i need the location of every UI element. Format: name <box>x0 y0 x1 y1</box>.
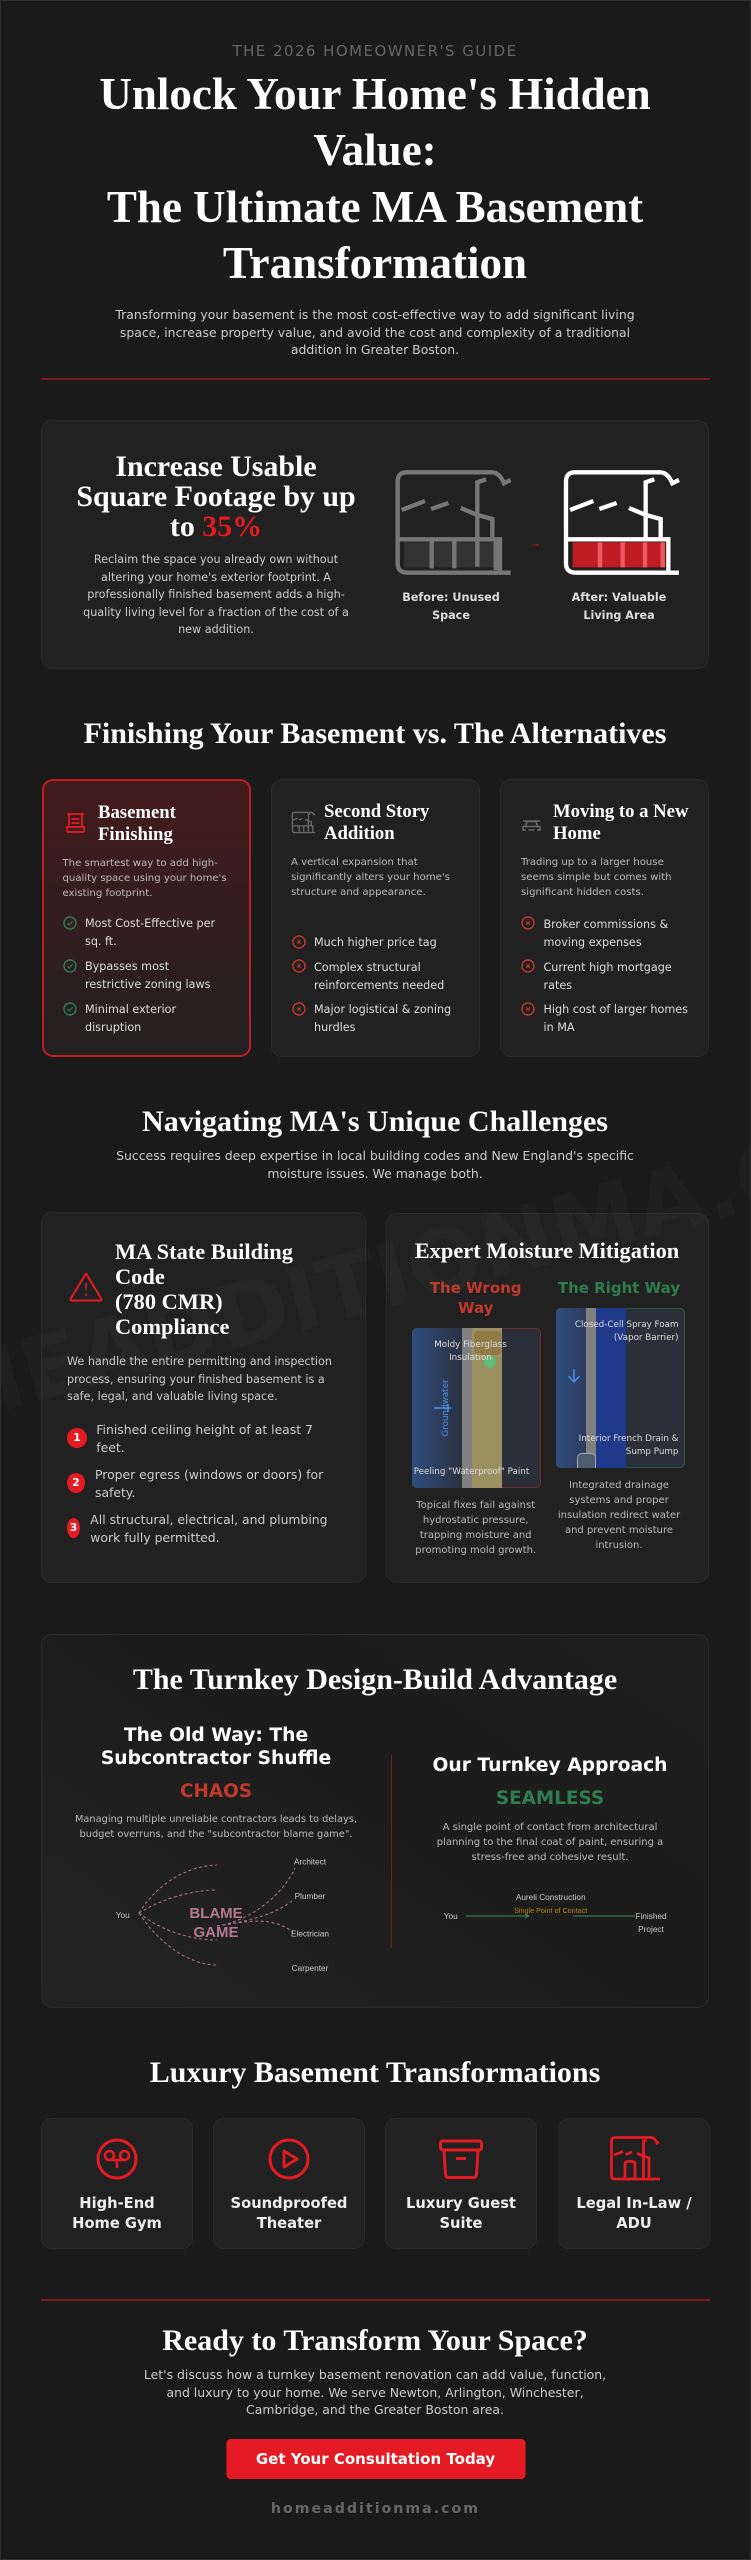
description: Trading up to a larger house <box>521 857 664 868</box>
subtitle: space, increase property value, and avoid the cost and complexity of a traditional <box>120 325 630 340</box>
drawback 1 <box>544 918 668 949</box>
subtitle: addition in Greater Boston. <box>291 342 459 357</box>
icon: play <box>267 2137 311 2181</box>
button: Get Your Consultation Today <box>256 2450 495 2468</box>
heading <box>76 450 356 543</box>
label: groundwater: Groundwater <box>441 1379 451 1437</box>
label: Home Gym <box>72 2215 162 2232</box>
label: insulation <box>434 1339 507 1364</box>
wrong way caption <box>415 1498 536 1558</box>
panel: theater <box>213 2118 365 2249</box>
description: significantly alters your home's <box>291 872 450 883</box>
heading: Expert Moisture Mitigation <box>415 1238 679 1263</box>
heading: Increase Usable <box>115 450 317 483</box>
description: quality space using your home's <box>62 872 227 884</box>
heading <box>115 1238 293 1338</box>
description: new addition. <box>178 623 254 636</box>
badge 2 <box>67 1473 85 1493</box>
badge 3 <box>67 1518 80 1538</box>
heading <box>98 802 176 845</box>
requirement 2: safety. <box>95 1485 135 1500</box>
description <box>520 857 672 898</box>
right way caption: systems and proper <box>569 1495 669 1506</box>
badge 1 <box>67 1428 87 1448</box>
description <box>291 857 450 898</box>
heading: Ready to Transform Your Space? <box>162 2324 588 2357</box>
header rule <box>41 378 710 380</box>
drawback 2 <box>314 961 444 992</box>
wrong way caption: hydrostatic pressure, <box>423 1515 528 1526</box>
peeling paint layer <box>472 1328 502 1488</box>
icon: gym <box>95 2137 139 2181</box>
label: Soundproofed <box>231 2195 347 2212</box>
description: seems simple but comes with <box>521 872 672 883</box>
right way heading: The Right Way <box>558 1279 680 1297</box>
chaos label: CHAOS <box>180 1781 252 1802</box>
drawback 3: in MA <box>544 1021 575 1034</box>
icon: house with door <box>610 2136 660 2181</box>
description: The smartest way to add high- <box>62 858 218 868</box>
heading: Square Footage by up <box>76 480 356 513</box>
label: foam <box>575 1319 678 1344</box>
groundwater layer <box>412 1328 462 1488</box>
description <box>144 2366 606 2419</box>
wrong way heading: Way <box>458 1299 493 1317</box>
old way description: Managing multiple unreliable contractors leads to delays, <box>75 1814 357 1825</box>
drawback 1: Broker commissions & <box>544 918 668 931</box>
drawback 2 <box>544 961 672 992</box>
panel: turnkey advantage <box>41 1634 709 2008</box>
wrong way heading: The Wrong <box>430 1279 522 1297</box>
vertical divider <box>390 1755 392 1948</box>
heading: transformations: Luxury Basement Transformations <box>150 2056 600 2089</box>
icon: check <box>63 959 77 973</box>
description: safe, legal, and valuable living space. <box>67 1390 278 1403</box>
benefit 1: Most Cost-Effective per <box>85 917 215 930</box>
footer rule <box>41 2299 710 2301</box>
description: altering your home's exterior footprint. A <box>101 571 331 584</box>
drawback 1: Much higher price tag <box>314 936 437 949</box>
panel: second story addition <box>271 779 480 1057</box>
heading: Addition <box>324 823 395 844</box>
benefit 3: disruption <box>85 1021 141 1034</box>
label: before <box>402 591 500 622</box>
description: structure and appearance. <box>291 887 426 898</box>
diagram: right way <box>556 1308 684 1468</box>
challenges intro <box>116 1148 634 1181</box>
heading: Home <box>553 823 601 844</box>
old way heading: The Old Way: The <box>124 1725 308 1746</box>
description: We handle the entire permitting and inspection <box>67 1355 332 1368</box>
heading <box>324 801 430 844</box>
diagram: subcontractor chaos: GAME <box>194 1924 238 1941</box>
label: before: Before: Unused <box>402 591 500 604</box>
icon: second story <box>292 812 316 834</box>
seamless label: SEAMLESS <box>496 1788 604 1809</box>
requirement 3: All structural, electrical, and plumbing <box>90 1512 328 1527</box>
icon: warning <box>69 1272 103 1302</box>
benefit 2 <box>85 960 210 991</box>
wrong way caption: trapping moisture and <box>420 1530 532 1541</box>
old way heading: Subcontractor Shuffle <box>101 1748 331 1769</box>
drawback 1: moving expenses <box>544 936 642 949</box>
icon: after house <box>566 472 679 573</box>
label <box>406 2194 516 2234</box>
panel: home gym <box>41 2118 193 2249</box>
description: quality living level for a fraction of the cost of a <box>83 606 349 619</box>
panel: guest suite <box>385 2118 537 2249</box>
label: after <box>572 591 666 622</box>
benefit 1 <box>85 917 216 948</box>
badge 3: 3 <box>70 1521 77 1534</box>
heading: The Turnkey Design-Build Advantage <box>133 1663 617 1696</box>
subtitle <box>115 307 635 357</box>
diagram: seamless line: Project <box>638 1925 665 1934</box>
icon: cross <box>521 959 535 973</box>
icon: before and after basement diagrams <box>396 470 680 575</box>
description <box>83 553 349 636</box>
label <box>231 2194 347 2234</box>
description: professionally finished basement adds a high- <box>87 588 345 601</box>
diagram: subcontractor chaos: Architect <box>294 1858 327 1866</box>
heading: comparison: Finishing Your Basement vs. The Alternatives <box>84 717 666 750</box>
right way caption: and prevent moisture <box>565 1525 673 1536</box>
heading: Second Story <box>324 801 429 822</box>
requirement 1 <box>96 1422 313 1455</box>
diagram: subcontractor chaos: You <box>116 1911 130 1920</box>
description: existing footprint. <box>62 888 152 898</box>
benefit 2: Bypasses most <box>85 960 169 973</box>
heading: Compliance <box>115 1314 229 1338</box>
heading: Code <box>115 1264 165 1288</box>
panel: moving to a new home <box>500 779 709 1057</box>
spray foam layer <box>596 1308 626 1468</box>
label: foam: (Vapor Barrier) <box>614 1332 678 1342</box>
diagram: subcontractor chaos: Carpenter <box>292 1964 329 1973</box>
icon: check <box>63 1002 77 1016</box>
icon: cross <box>521 1002 535 1016</box>
heading: to 35% <box>170 510 262 543</box>
title: The Ultimate MA Basement <box>107 182 643 232</box>
groundwater layer <box>556 1308 586 1468</box>
label: Suite <box>439 2215 483 2232</box>
heading: Moving to a New <box>553 801 688 822</box>
challenges intro: moisture issues. We manage both. <box>267 1166 483 1181</box>
diagram: seamless line: Single Point of Contact <box>514 1906 587 1915</box>
turnkey description <box>437 1820 663 1865</box>
benefit 3: Minimal exterior <box>85 1003 176 1016</box>
label: Luxury Guest <box>406 2195 516 2212</box>
wrong way caption: Topical fixes fail against <box>416 1500 535 1511</box>
label: insulation: Moldy Fiberglass <box>434 1340 507 1350</box>
diagram: seamless line: You <box>444 1912 458 1921</box>
description: significant hidden costs. <box>521 887 644 898</box>
diagram: subcontractor chaos: BLAME <box>189 1905 243 1922</box>
diagram: seamless line <box>440 1884 670 1944</box>
label <box>72 2194 162 2234</box>
label: paint: Peeling "Waterproof" Paint <box>414 1466 529 1476</box>
challenges intro: Success requires deep expertise in local building codes and New England's specific <box>116 1148 634 1163</box>
subtitle: Transforming your basement is the most cost-effective way to add significant living <box>115 307 635 322</box>
sump pump <box>576 1453 596 1469</box>
diagram: subcontractor chaos <box>101 1854 341 1974</box>
title <box>99 69 651 288</box>
diagram: subcontractor chaos: Electrician <box>291 1930 329 1938</box>
label: after: After: Valuable <box>572 591 666 604</box>
requirement 2: Proper egress (windows or doors) for <box>95 1467 323 1482</box>
drawback 2: rates <box>544 979 572 992</box>
old way description <box>75 1812 357 1842</box>
badge 2: 2 <box>72 1476 80 1489</box>
title: Value: <box>313 125 437 175</box>
icon: basement <box>66 813 85 833</box>
title: Transformation <box>223 238 527 288</box>
drawback 3: hurdles <box>314 1021 356 1034</box>
icon: cross <box>292 1002 306 1016</box>
description: Let's discuss how a turnkey basement renovation can add value, function, <box>144 2367 606 2382</box>
label: drain: Interior French Drain & <box>579 1434 678 1444</box>
drawback 2: Current high mortgage <box>544 961 672 974</box>
call to action <box>41 2320 710 2525</box>
arrow: drainage <box>556 1308 684 1468</box>
label: ADU <box>616 2215 652 2232</box>
description <box>62 858 227 898</box>
icon: check <box>63 916 77 930</box>
eyebrow: THE 2026 HOMEOWNER'S GUIDE <box>232 42 518 60</box>
label <box>576 2194 692 2234</box>
requirement 1: Finished ceiling height of at least 7 <box>96 1422 313 1437</box>
drawback 3: High cost of larger homes <box>544 1003 688 1016</box>
heading: (780 CMR) <box>115 1288 223 1314</box>
turnkey description: A single point of contact from architectural <box>443 1822 657 1833</box>
icon: cross <box>521 916 535 930</box>
description: and luxury to your home. We serve Newton, Arlington, Winchester, <box>166 2385 584 2400</box>
drawback 2: reinforcements needed <box>314 979 444 992</box>
mold patch <box>474 1331 501 1355</box>
drawback 3 <box>314 1003 451 1034</box>
label: foam: Closed-Cell Spray Foam <box>575 1320 678 1330</box>
label: Legal In-Law / <box>576 2195 692 2212</box>
benefit 3 <box>85 1003 176 1034</box>
mold spot <box>484 1356 496 1368</box>
icon: before house <box>398 472 511 573</box>
diagram: subcontractor chaos: Plumber <box>295 1892 326 1901</box>
icon: cross <box>292 959 306 973</box>
heading <box>553 801 688 844</box>
diagram: wrong way <box>412 1328 540 1488</box>
description: process, ensuring your finished basement is a <box>67 1373 325 1386</box>
label: High-End <box>79 2195 155 2212</box>
arrow: water pressure <box>412 1328 540 1488</box>
label: drain <box>579 1433 678 1458</box>
drawback 3 <box>544 1003 688 1034</box>
panel: basement finishing <box>42 779 251 1057</box>
website: homeadditionma.com <box>271 2500 480 2516</box>
label: insulation: Insulation <box>449 1352 492 1362</box>
wrong way caption: promoting mold growth. <box>415 1545 536 1556</box>
requirement 2 <box>95 1467 324 1500</box>
heading: Finishing <box>98 824 173 845</box>
old way heading <box>101 1725 331 1770</box>
label: Theater <box>257 2215 321 2232</box>
right way caption: insulation redirect water <box>558 1510 680 1521</box>
button <box>226 2439 525 2479</box>
arrow <box>532 544 538 546</box>
wall <box>462 1328 472 1488</box>
panel: in-law ADU <box>558 2118 710 2249</box>
right way caption: intrusion. <box>595 1540 643 1551</box>
old way description: budget overruns, and the "subcontractor blame game". <box>80 1829 352 1840</box>
description: A vertical expansion that <box>291 857 418 868</box>
panel: building code compliance <box>41 1212 366 1583</box>
label: drain: Sump Pump <box>626 1446 678 1456</box>
icon: cross <box>292 935 306 949</box>
badge 1: 1 <box>73 1431 81 1444</box>
heading: MA State Building <box>115 1238 293 1264</box>
turnkey heading: Our Turnkey Approach <box>433 1755 667 1776</box>
requirement 1: feet. <box>96 1440 125 1455</box>
icon: suite box <box>439 2137 483 2181</box>
icon: car <box>522 820 541 831</box>
benefit 2: restrictive zoning laws <box>85 978 210 991</box>
right way caption: Integrated drainage <box>569 1480 669 1491</box>
description <box>67 1355 332 1403</box>
label: before: Space <box>432 609 470 622</box>
turnkey description: planning to the final coat of paint, ensuring a <box>437 1837 663 1848</box>
description: Reclaim the space you already own without <box>94 553 338 566</box>
right way caption <box>558 1478 680 1553</box>
turnkey description: stress-free and cohesive result. <box>472 1852 628 1863</box>
requirement 3: work fully permitted. <box>90 1530 220 1545</box>
diagram: seamless line: Aureli Construction <box>516 1893 586 1902</box>
wrong way heading <box>430 1278 522 1318</box>
label: after: Living Area <box>583 609 655 622</box>
panel: increase usable square footage <box>41 420 709 669</box>
heading: challenges: Navigating MA's Unique Challenges <box>142 1105 608 1138</box>
title: Unlock Your Home's Hidden <box>99 69 651 119</box>
wall <box>586 1308 596 1468</box>
description: Cambridge, and the Greater Boston area. <box>246 2402 504 2417</box>
drawback 3: Major logistical & zoning <box>314 1003 451 1016</box>
benefit 1: sq. ft. <box>85 935 117 948</box>
diagram: seamless line: Finished <box>635 1912 667 1921</box>
panel: moisture mitigation <box>386 1213 709 1583</box>
header <box>41 42 710 380</box>
requirement 3 <box>90 1511 328 1546</box>
heading: Basement <box>98 802 176 822</box>
drawback 2: Complex structural <box>314 961 421 974</box>
